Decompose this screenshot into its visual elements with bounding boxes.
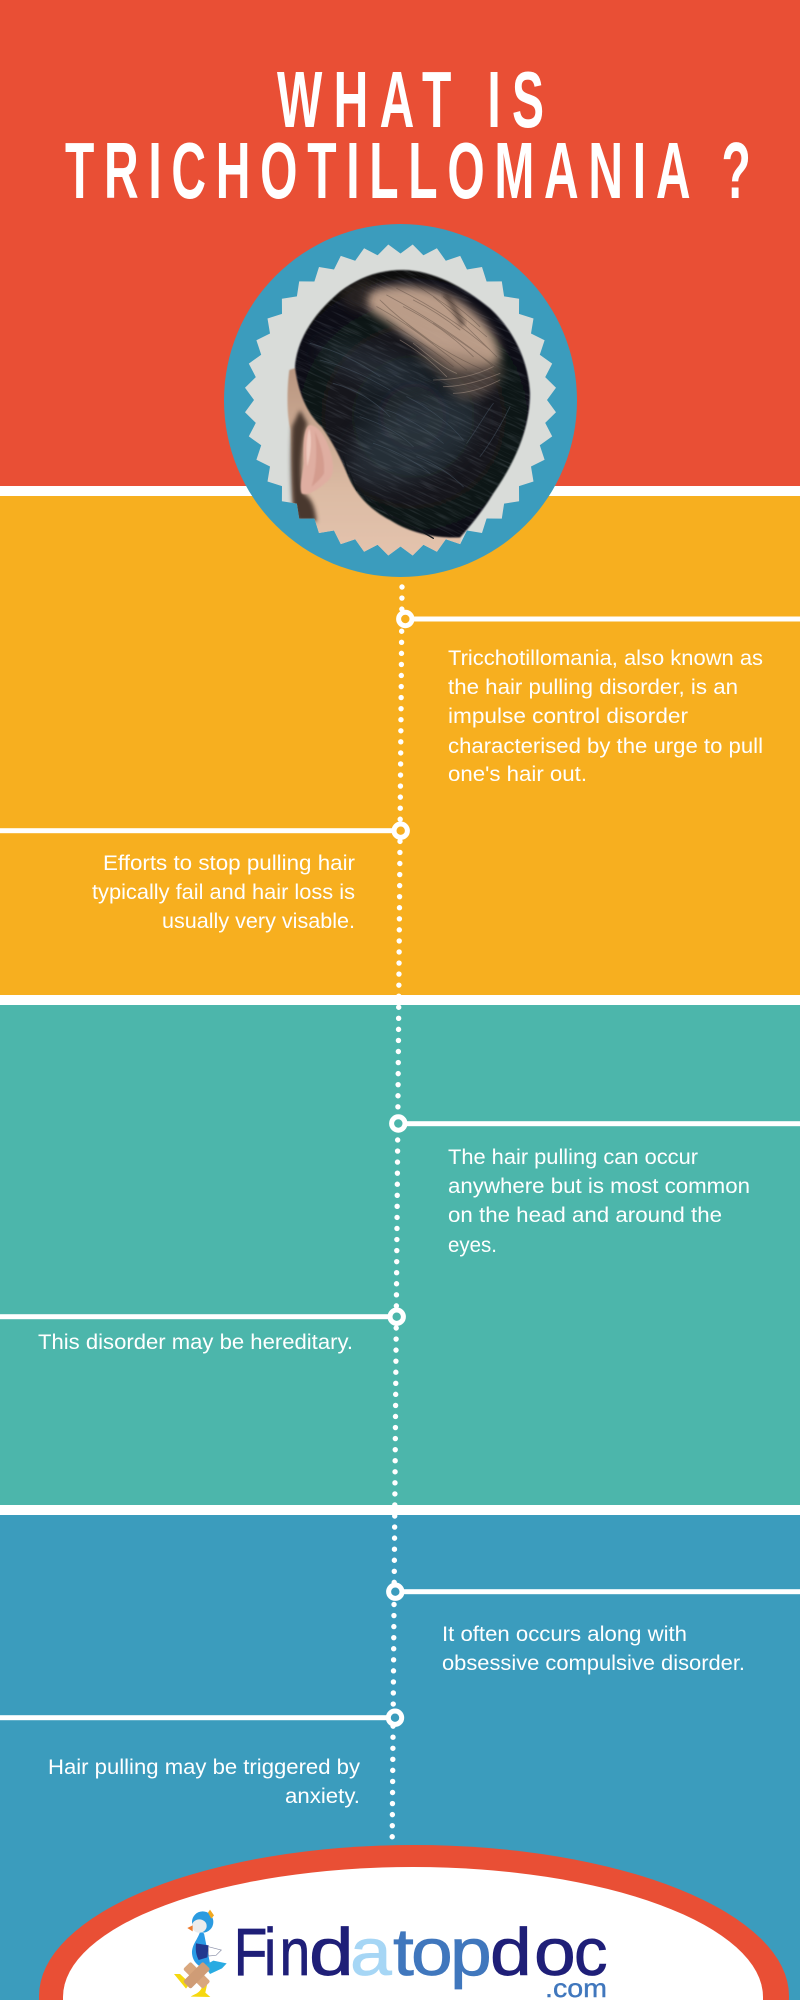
connector 5: right line and node xyxy=(389,1585,800,1598)
text block: efforts to stop xyxy=(92,852,355,933)
logo wordmark xyxy=(234,1914,607,2000)
text block: definition: the hair pulling disorder, is an xyxy=(448,676,738,699)
text block: efforts to stop: usually very visable. xyxy=(162,910,355,933)
text block: definition: one's hair out. xyxy=(448,763,587,786)
dotted timeline xyxy=(392,587,402,1838)
text block: anxiety: anxiety. xyxy=(285,1785,360,1808)
footer ellipse: white centre xyxy=(63,1867,763,2000)
title: TRICHOTILLOMANIA ? xyxy=(65,125,751,215)
hair photo badge xyxy=(224,224,577,577)
connector 1: right line and node xyxy=(399,612,800,626)
title: WHAT IS xyxy=(277,54,544,144)
connector 2: left line and node xyxy=(0,824,407,837)
text block: definition xyxy=(448,647,763,786)
background band: blue section xyxy=(0,1515,800,2000)
background band: yellow section xyxy=(0,496,800,995)
icon: duck mascot with bandage xyxy=(174,1910,227,1997)
text block: where pulling occurs xyxy=(448,1146,750,1257)
connector 3: right line and node xyxy=(392,1117,800,1130)
connector 4: left line and node xyxy=(0,1310,403,1323)
text block: definition: characterised by the urge to pull xyxy=(448,735,763,758)
text block: OCD: obsessive compulsive disorder. xyxy=(442,1652,745,1675)
text block: where pulling occurs: eyes. xyxy=(448,1234,497,1257)
text block: OCD xyxy=(442,1623,745,1675)
text block: anxiety: Hair pulling may be triggered by xyxy=(48,1756,361,1779)
text block: efforts to stop: typically fail and hair loss is xyxy=(92,881,355,904)
text block: hereditary: This disorder may be hereditary. xyxy=(38,1331,353,1354)
background band: red header xyxy=(0,0,800,486)
text block: where pulling occurs: on the head and around the xyxy=(448,1204,722,1227)
title xyxy=(65,54,751,215)
logo wordmark: d xyxy=(309,1914,354,1989)
logo wordmark: do xyxy=(490,1916,576,1990)
footer ellipse: red rim xyxy=(39,1845,789,2000)
text block: where pulling occurs: The hair pulling can occur xyxy=(448,1146,698,1169)
text block: where pulling occurs: anywhere but is most common xyxy=(448,1175,750,1198)
text block: definition: impulse control disorder xyxy=(448,705,688,728)
logo wordmark: top xyxy=(393,1916,492,1990)
photo of balding head in starburst xyxy=(245,244,556,556)
text block: OCD: It often occurs along with xyxy=(442,1623,687,1646)
logo wordmark: Fin xyxy=(234,1915,310,1989)
logo wordmark: a xyxy=(350,1916,392,1990)
logo wordmark: c xyxy=(574,1915,608,1990)
background band: teal section xyxy=(0,1005,800,1505)
text block: anxiety xyxy=(48,1756,361,1808)
text block: definition: Tricchotillomania, also known as xyxy=(448,647,763,670)
connector 6: left line and node xyxy=(0,1711,402,1724)
text block: efforts to stop: Efforts to stop pulling hair xyxy=(103,852,355,875)
